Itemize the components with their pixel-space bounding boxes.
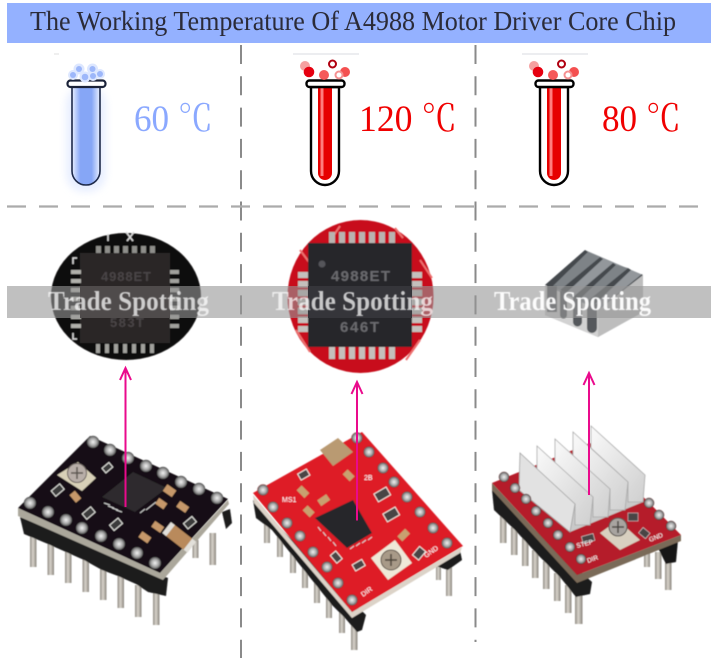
silkscreen labels: 2B xyxy=(364,475,373,482)
board edge xyxy=(253,495,462,618)
core chip xyxy=(102,472,167,512)
watermark text: Trade Spotting xyxy=(48,286,209,316)
photo: red A4988 board with heat sink xyxy=(492,426,681,624)
board edge xyxy=(18,500,229,580)
chip close-up: red board: 646T xyxy=(340,319,379,336)
board face xyxy=(18,436,228,573)
header block xyxy=(492,490,592,597)
front legs xyxy=(264,515,358,650)
back pins xyxy=(644,540,678,590)
watermark band xyxy=(7,286,711,318)
solder joints xyxy=(24,436,223,569)
arrow: red board chip xyxy=(352,382,362,520)
chip close-up: red board: 4988ET xyxy=(331,268,390,285)
trimmer xyxy=(600,518,640,550)
arrow: black board chip xyxy=(120,368,131,507)
chip close-up: red board xyxy=(288,220,434,373)
temperature 60 C: 60 ℃ xyxy=(134,99,213,140)
heat sink close-up xyxy=(545,250,643,337)
chip close-up: black board: 4988ET xyxy=(101,269,151,284)
watermark text: Trade Spotting xyxy=(494,286,651,316)
trimmer xyxy=(371,540,412,580)
large capacitor xyxy=(320,438,353,466)
small parts xyxy=(581,513,650,543)
silkscreen labels: GND xyxy=(648,532,664,544)
trimmer xyxy=(57,462,96,491)
chip close-up: black board: 583T xyxy=(110,315,144,330)
core chip xyxy=(315,500,372,548)
silkscreen labels: DIR xyxy=(586,554,599,565)
header block xyxy=(253,500,366,632)
watermark text: Trade Spotting xyxy=(272,286,433,316)
capacitors xyxy=(69,484,189,543)
watermark text xyxy=(48,286,651,316)
heat sink fins xyxy=(519,426,645,532)
icon: red test tube 80 xyxy=(522,54,588,185)
silkscreen labels xyxy=(576,532,664,565)
icon: blue test tube xyxy=(54,54,106,192)
solder joints xyxy=(258,432,452,606)
temperature 120 C: 120 ℃ xyxy=(359,99,457,140)
silkscreen labels: DIR xyxy=(360,586,374,599)
photo: black A4988 driver board xyxy=(18,436,232,625)
temperature 80 C: 80 ℃ xyxy=(602,99,681,140)
arrow: heat sink xyxy=(584,373,594,495)
silkscreen labels: STEP xyxy=(576,539,594,550)
small capacitors xyxy=(297,469,410,541)
silkscreen labels: GND xyxy=(423,545,440,560)
chip close-up: black board xyxy=(51,232,201,360)
photo: red A4988 driver board xyxy=(253,432,463,650)
back pins xyxy=(192,509,232,565)
board face xyxy=(492,443,681,575)
solder joints xyxy=(499,472,676,564)
board edge xyxy=(492,483,681,583)
resistors xyxy=(298,469,426,571)
header block xyxy=(20,517,168,596)
board face xyxy=(253,432,463,612)
front legs xyxy=(500,515,582,624)
front legs xyxy=(30,535,160,625)
silkscreen labels xyxy=(282,475,440,599)
title banner: The Working Temperature Of A4988 Motor Driver Core Chip xyxy=(30,6,676,36)
resistors xyxy=(51,462,196,531)
silkscreen labels: MS1 xyxy=(282,497,296,504)
back pins xyxy=(436,550,462,596)
icon: red test tube 120 xyxy=(293,54,359,185)
